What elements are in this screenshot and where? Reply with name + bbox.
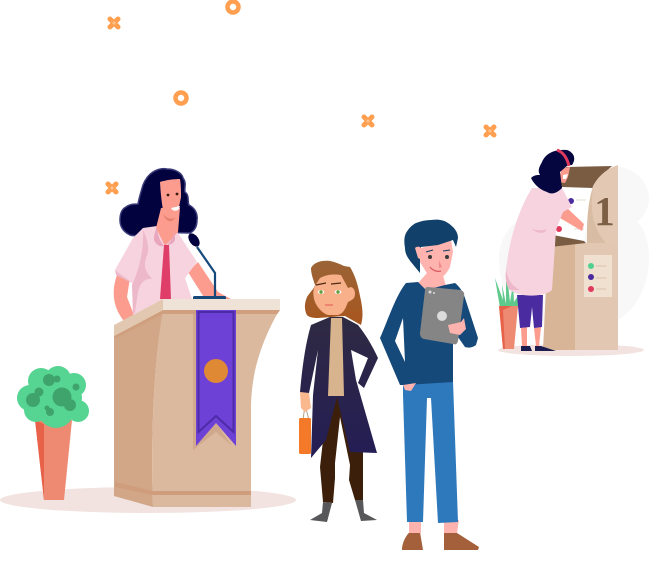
- tablet: [420, 287, 464, 344]
- background blob: [499, 166, 649, 330]
- hand: [300, 392, 311, 412]
- voting machine: [543, 165, 618, 350]
- shirt: [115, 226, 197, 315]
- sweater: [380, 282, 478, 385]
- machine number: 1: [594, 188, 615, 234]
- ground shadow: [498, 344, 644, 356]
- shoes: [402, 532, 479, 550]
- neck: [418, 272, 446, 290]
- neck and face: [156, 208, 180, 246]
- shopping bag: [299, 405, 311, 454]
- ankles: [409, 520, 459, 533]
- hand on tablet: [448, 318, 466, 335]
- ribbon: [193, 310, 236, 450]
- speaker woman: [114, 169, 231, 321]
- hair: [120, 169, 197, 236]
- voting booth scene: [495, 150, 649, 356]
- coat: [300, 317, 378, 458]
- head: [420, 240, 453, 278]
- legs: [320, 396, 363, 503]
- potted grass: [495, 266, 518, 349]
- voter woman: [506, 150, 584, 351]
- decoration: orange sparkles and rings: [108, 2, 494, 192]
- jeans: [403, 381, 458, 523]
- top: [328, 318, 344, 396]
- instruction card: [584, 255, 612, 297]
- collar: [154, 227, 175, 246]
- tie: [160, 245, 171, 299]
- microphone: [186, 231, 226, 300]
- man with tablet: [380, 220, 479, 550]
- woman with bag: [299, 261, 378, 522]
- hand in pocket: [403, 383, 416, 391]
- boots: [310, 500, 377, 522]
- main ground shadow: [0, 487, 296, 513]
- podium: [114, 299, 280, 507]
- potted bush: [17, 366, 89, 500]
- face: [313, 274, 355, 315]
- arms: [114, 275, 134, 321]
- hair: [305, 261, 363, 325]
